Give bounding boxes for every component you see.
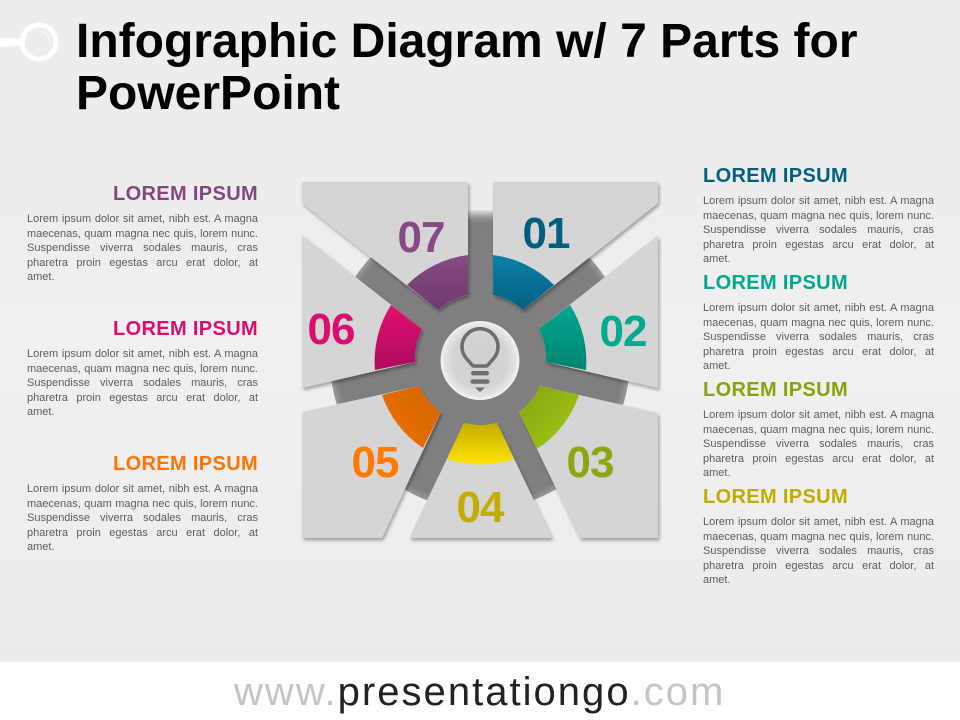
body text 03: pharetra proin egestas arcu erat dolor, at [703,452,934,464]
heading 05: LOREM IPSUM [113,453,258,475]
body text 03 [703,409,934,479]
body text 01: Lorem ipsum dolor sit amet, nibh est. A magna [703,195,934,207]
body text 01: maecenas, quam magna nec quis, lorem nunc. [703,210,934,222]
segment 03 [519,386,658,538]
text block: 02 lorem ipsum [703,272,934,372]
title: Infographic Diagram w/ 7 Parts for [76,15,858,68]
website url: www.presentationgo.com [234,670,725,714]
body text 07 [27,213,258,283]
body text 03: Suspendisse viverra sodales mauris, cras [703,438,934,450]
body text 05: amet. [27,541,55,553]
body text 01 [703,195,934,265]
body text 06: pharetra proin egestas arcu erat dolor, at [27,392,258,404]
title: PowerPoint [76,67,340,120]
body text 07: amet. [27,271,55,283]
body text 06 [27,348,258,418]
body text 04: Suspendisse viverra sodales mauris, cras [703,545,934,557]
body text 05 [27,483,258,553]
segment 05 [302,386,441,538]
segment 07: 07 [398,213,444,262]
body text 07: maecenas, quam magna nec quis, lorem nunc. [27,228,258,240]
body text 01: pharetra proin egestas arcu erat dolor, at [703,238,934,250]
text block: 06 lorem ipsum [27,318,258,418]
title [76,15,858,120]
text block: 01 lorem ipsum [703,165,934,265]
segment 03: 03 [567,438,613,487]
body text 04: Lorem ipsum dolor sit amet, nibh est. A magna [703,516,934,528]
segment 02: 02 [600,307,646,356]
segment 04: 04 [457,483,505,532]
text block: 07 lorem ipsum [27,183,258,283]
body text 06: Lorem ipsum dolor sit amet, nibh est. A magna [27,348,258,360]
icon: light bulb [462,329,498,392]
body text 02: pharetra proin egestas arcu erat dolor, at [703,346,934,358]
body text 04: amet. [703,574,731,586]
text block: 05 lorem ipsum [27,453,258,553]
heading 06: LOREM IPSUM [113,318,258,340]
body text 03: Lorem ipsum dolor sit amet, nibh est. A magna [703,409,934,421]
body text 02: Lorem ipsum dolor sit amet, nibh est. A magna [703,302,934,314]
body text 05: Suspendisse viverra sodales mauris, cras [27,512,258,524]
body text 05: pharetra proin egestas arcu erat dolor, at [27,526,258,538]
body text 04 [703,516,934,586]
heading 04: LOREM IPSUM [703,486,848,508]
body text 01: amet. [703,253,731,265]
segment 07 [302,182,468,310]
body text 03: maecenas, quam magna nec quis, lorem nunc. [703,424,934,436]
body text 02: maecenas, quam magna nec quis, lorem nunc. [703,316,934,328]
logo: white ring with pointer [0,22,58,62]
segment 05: 05 [352,438,399,487]
body text 01: Suspendisse viverra sodales mauris, cras [703,224,934,236]
text block: 03 lorem ipsum [703,379,934,479]
heading 03: LOREM IPSUM [703,379,848,401]
body text 05: Lorem ipsum dolor sit amet, nibh est. A magna [27,483,258,495]
heading 01: LOREM IPSUM [703,165,848,187]
heading 02: LOREM IPSUM [703,272,848,294]
segment 02 [539,235,658,388]
footer band [0,662,960,720]
body text 07: Suspendisse viverra sodales mauris, cras [27,242,258,254]
text block: 04 lorem ipsum [703,486,934,586]
body text 06: maecenas, quam magna nec quis, lorem nunc. [27,362,258,374]
body text 03: amet. [703,467,731,479]
body text 06: Suspendisse viverra sodales mauris, cras [27,377,258,389]
body text 07: Lorem ipsum dolor sit amet, nibh est. A magna [27,213,258,225]
segment 04 [409,423,552,538]
body text 02 [703,302,934,372]
body text 07: pharetra proin egestas arcu erat dolor, at [27,256,258,268]
center hub button [440,321,520,400]
gray central disc with spokes [330,210,630,510]
body text 02: Suspendisse viverra sodales mauris, cras [703,331,934,343]
body text 06: amet. [27,406,55,418]
heading 07: LOREM IPSUM [113,183,258,205]
body text 04: pharetra proin egestas arcu erat dolor, at [703,560,934,572]
body text 04: maecenas, quam magna nec quis, lorem nunc. [703,530,934,542]
body text 05: maecenas, quam magna nec quis, lorem nunc. [27,498,258,510]
segment 06: 06 [308,305,354,354]
segment 06 [302,235,422,388]
body text 02: amet. [703,360,731,372]
segment 01 [493,182,658,310]
segment 01: 01 [523,209,570,258]
